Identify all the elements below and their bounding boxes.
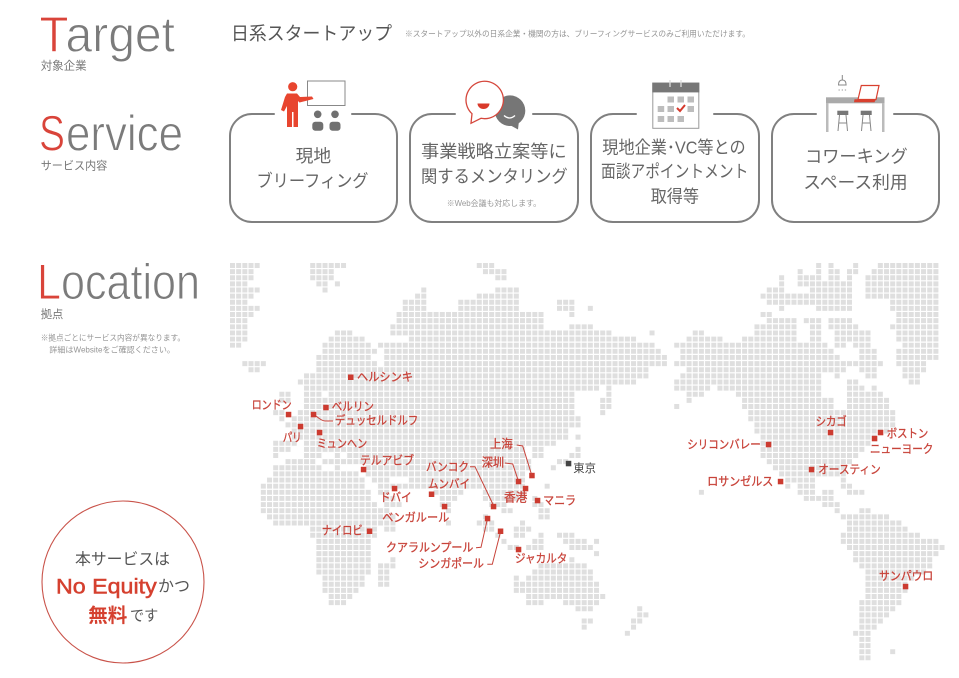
city: Berlin: ベルリン (332, 400, 374, 414)
city: Hong Kong: 香港 (504, 491, 527, 505)
city: Dusseldorf (311, 412, 418, 428)
panel text: coworking: コワーキング (805, 147, 908, 167)
panel: coworking (772, 75, 939, 222)
panel text: briefing (256, 146, 368, 191)
callout: no equity and free: かつ (158, 578, 190, 596)
panel text: appointments: 面談アポイントメント (601, 162, 748, 182)
city: Mumbai: ムンバイ (428, 477, 470, 491)
heading: Location: L (37, 254, 61, 310)
panel outline: briefing (230, 114, 397, 222)
city: Munich: ミュンヘン (317, 436, 367, 450)
heading: Service: サービス内容 (41, 159, 108, 173)
city: Singapore: シンガポール (418, 557, 484, 571)
city: Tel Aviv (360, 453, 414, 472)
city: Chicago: シカゴ (816, 414, 847, 429)
city: Tokyo: 東京 (573, 462, 596, 475)
city: Bengaluru: ベンガルール (382, 510, 449, 524)
city: Chicago (816, 414, 847, 435)
heading: Target: 対象企業 (41, 59, 87, 73)
city: Helsinki: ヘルシンキ (357, 370, 413, 384)
heading: Target: arget (66, 7, 175, 63)
callout: no equity and free: です (130, 608, 158, 624)
city: Bengaluru (382, 504, 449, 524)
panel text: briefing: 現地 (296, 146, 331, 166)
icon: calendar (652, 80, 699, 128)
panel text: appointments: 現地企業･VC等との (602, 137, 746, 157)
heading: Location (37, 254, 200, 321)
city: Paris: パリ (283, 430, 302, 444)
heading: Service: S (39, 106, 65, 162)
target text: 日系スタートアップ (231, 23, 392, 44)
city: Silicon Valley: シリコンバレー (687, 437, 761, 451)
panel text: appointments: 取得等 (651, 187, 699, 207)
city: Tel Aviv: テルアビブ (360, 453, 414, 468)
panel text: appointments (601, 137, 748, 207)
panel text: briefing: ブリーフィング (256, 171, 368, 191)
panel text: coworking: スペース利用 (803, 173, 908, 193)
city: Bangkok (426, 460, 496, 509)
panel text: mentoring (421, 142, 568, 208)
heading: Target (40, 7, 175, 73)
panel text: mentoring: ※Web会議も対応します。 (447, 198, 541, 208)
panel: appointments (591, 80, 759, 222)
panel text: mentoring: 関するメンタリング (421, 167, 568, 187)
icon: speech bubbles (466, 81, 525, 130)
target note: ※スタートアップ以外の日系企業・機関の方は、ブリーフィングサービスのみご利用いただけます。 (405, 28, 750, 38)
location note: ※拠点ごとにサービス内容が異なります。 (41, 332, 185, 342)
panel text: mentoring: 事業戦略立案等に (421, 142, 567, 162)
city: London (252, 398, 292, 417)
panel: briefing (230, 81, 397, 222)
heading: Target: T (40, 7, 68, 63)
city: Dubai: ドバイ (380, 491, 412, 505)
city: Munich (317, 430, 367, 450)
city: Bangkok: バンコク (426, 460, 469, 474)
city: Kuala Lumpur (386, 516, 490, 554)
heading: Service (39, 106, 183, 173)
heading: Location: ocation (61, 254, 200, 310)
location note: 詳細はWebsiteをご確認ください。 (49, 344, 175, 354)
city: Paris (283, 424, 303, 444)
panel outline: mentoring (410, 114, 578, 222)
city: Sao Paulo: サンパウロ (879, 569, 933, 583)
city: Jakarta (515, 547, 567, 565)
city: Boston: ボストン (887, 426, 928, 440)
panel text: coworking (803, 147, 908, 193)
city: Nairobi: ナイロビ (322, 524, 363, 538)
city: Kuala Lumpur: クアラルンプール (386, 540, 473, 554)
city: Dubai (380, 486, 412, 505)
city: Manila: マニラ (543, 494, 576, 508)
city: Shanghai (490, 437, 535, 478)
heading: Service: ervice (66, 106, 183, 162)
callout: no equity and free (42, 501, 204, 663)
callout: no equity and free: 本サービスは (75, 550, 170, 568)
city: Shenzhen: 深圳 (482, 456, 504, 470)
panel: mentoring (410, 81, 578, 222)
city: Los Angeles: ロサンゼルス (707, 475, 773, 489)
icon: presenter at whiteboard (281, 81, 345, 131)
callout: no equity and free: 無料 (88, 605, 128, 627)
location note (41, 332, 185, 354)
dot world map (230, 266, 946, 658)
city: Tokyo (566, 461, 596, 475)
city: Shanghai: 上海 (490, 437, 513, 451)
city: New York (870, 436, 933, 456)
heading: Location: 拠点 (41, 307, 63, 321)
city: Shenzhen (482, 456, 521, 484)
icon: coworking desk (826, 75, 884, 132)
panel outline: appointments (591, 114, 759, 222)
callout: no equity and free: No Equity (56, 576, 157, 598)
city: Jakarta: ジャカルタ (515, 551, 567, 565)
city: Singapore (418, 528, 503, 571)
city: New York: ニューヨーク (870, 442, 933, 456)
city: Mumbai (428, 477, 470, 497)
city: Dusseldorf: デュッセルドルフ (335, 413, 418, 428)
city: Austin: オースティン (818, 462, 881, 476)
city: Sao Paulo (879, 569, 933, 589)
panel outline: coworking (772, 114, 939, 222)
city: London: ロンドン (252, 398, 292, 412)
